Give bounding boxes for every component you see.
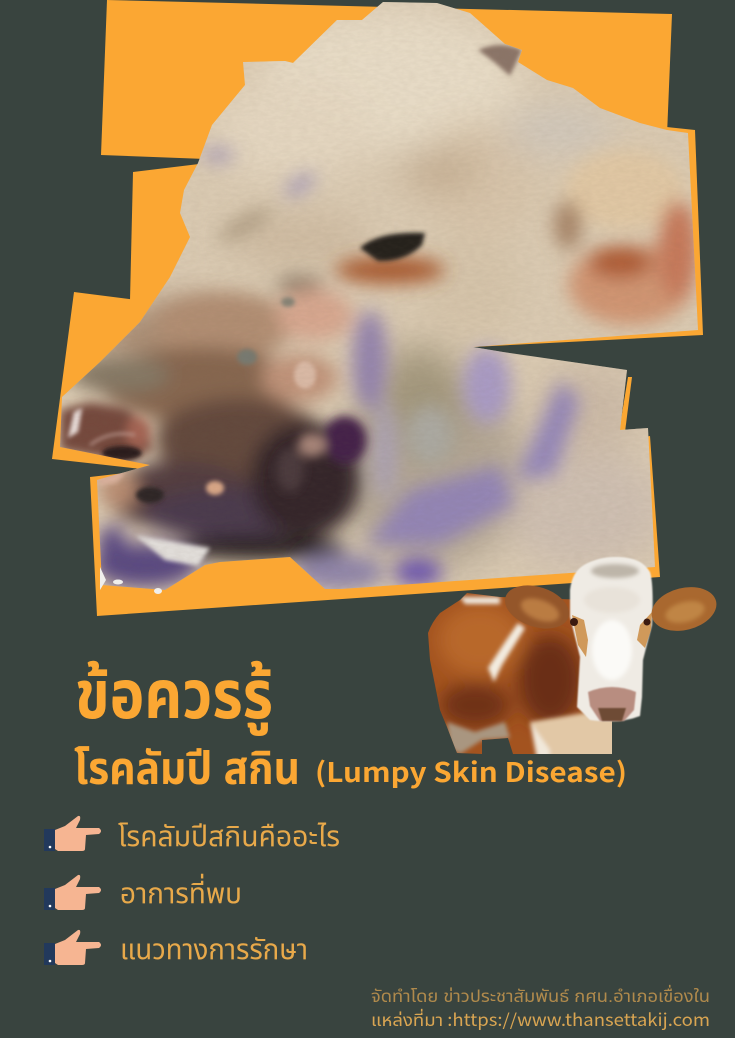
nose	[60, 402, 152, 462]
item 1: what is the disease	[44, 816, 340, 853]
horn	[478, 45, 522, 76]
item 3: treatment guidelines	[44, 930, 308, 966]
drool	[135, 535, 210, 566]
eye patches and eyes	[570, 612, 652, 657]
item 1: what is the disease: โรคลัมปีสกินคืออะไร	[118, 821, 340, 853]
eye	[360, 233, 425, 261]
muzzle	[155, 293, 295, 357]
ear	[568, 150, 680, 226]
infected cow head photo	[40, 0, 720, 610]
list items	[44, 816, 340, 966]
title: disease name Thai: โรคลัมปี สกิน	[74, 743, 300, 794]
title block	[74, 657, 627, 794]
item 2: symptoms: อาการที่พบ	[120, 873, 242, 910]
footer credits	[371, 984, 710, 1031]
item 3: treatment guidelines: แนวทางการรักษา	[120, 934, 308, 966]
sores	[281, 297, 295, 307]
face markings	[281, 169, 319, 201]
purple dye on neck	[365, 465, 515, 545]
item 2: symptoms	[44, 873, 242, 910]
credit line: จัดทำโดย ข่าวประชาสัมพันธ์ กศน.อำเภอเขื่องใน	[371, 984, 710, 1006]
head	[570, 557, 653, 721]
title: main heading: ข้อควรรู้	[75, 657, 273, 736]
muzzle	[588, 687, 636, 721]
milk drops	[100, 567, 162, 594]
source line: แหล่งที่มา :https://www.thansettakij.com	[371, 1006, 710, 1031]
small healthy cow photo	[428, 556, 716, 754]
orange panels	[52, 0, 703, 616]
title: disease name English: (Lumpy Skin Disease)	[315, 751, 627, 790]
ears	[499, 578, 721, 637]
photo collage: infected cow on orange panels	[40, 0, 720, 616]
